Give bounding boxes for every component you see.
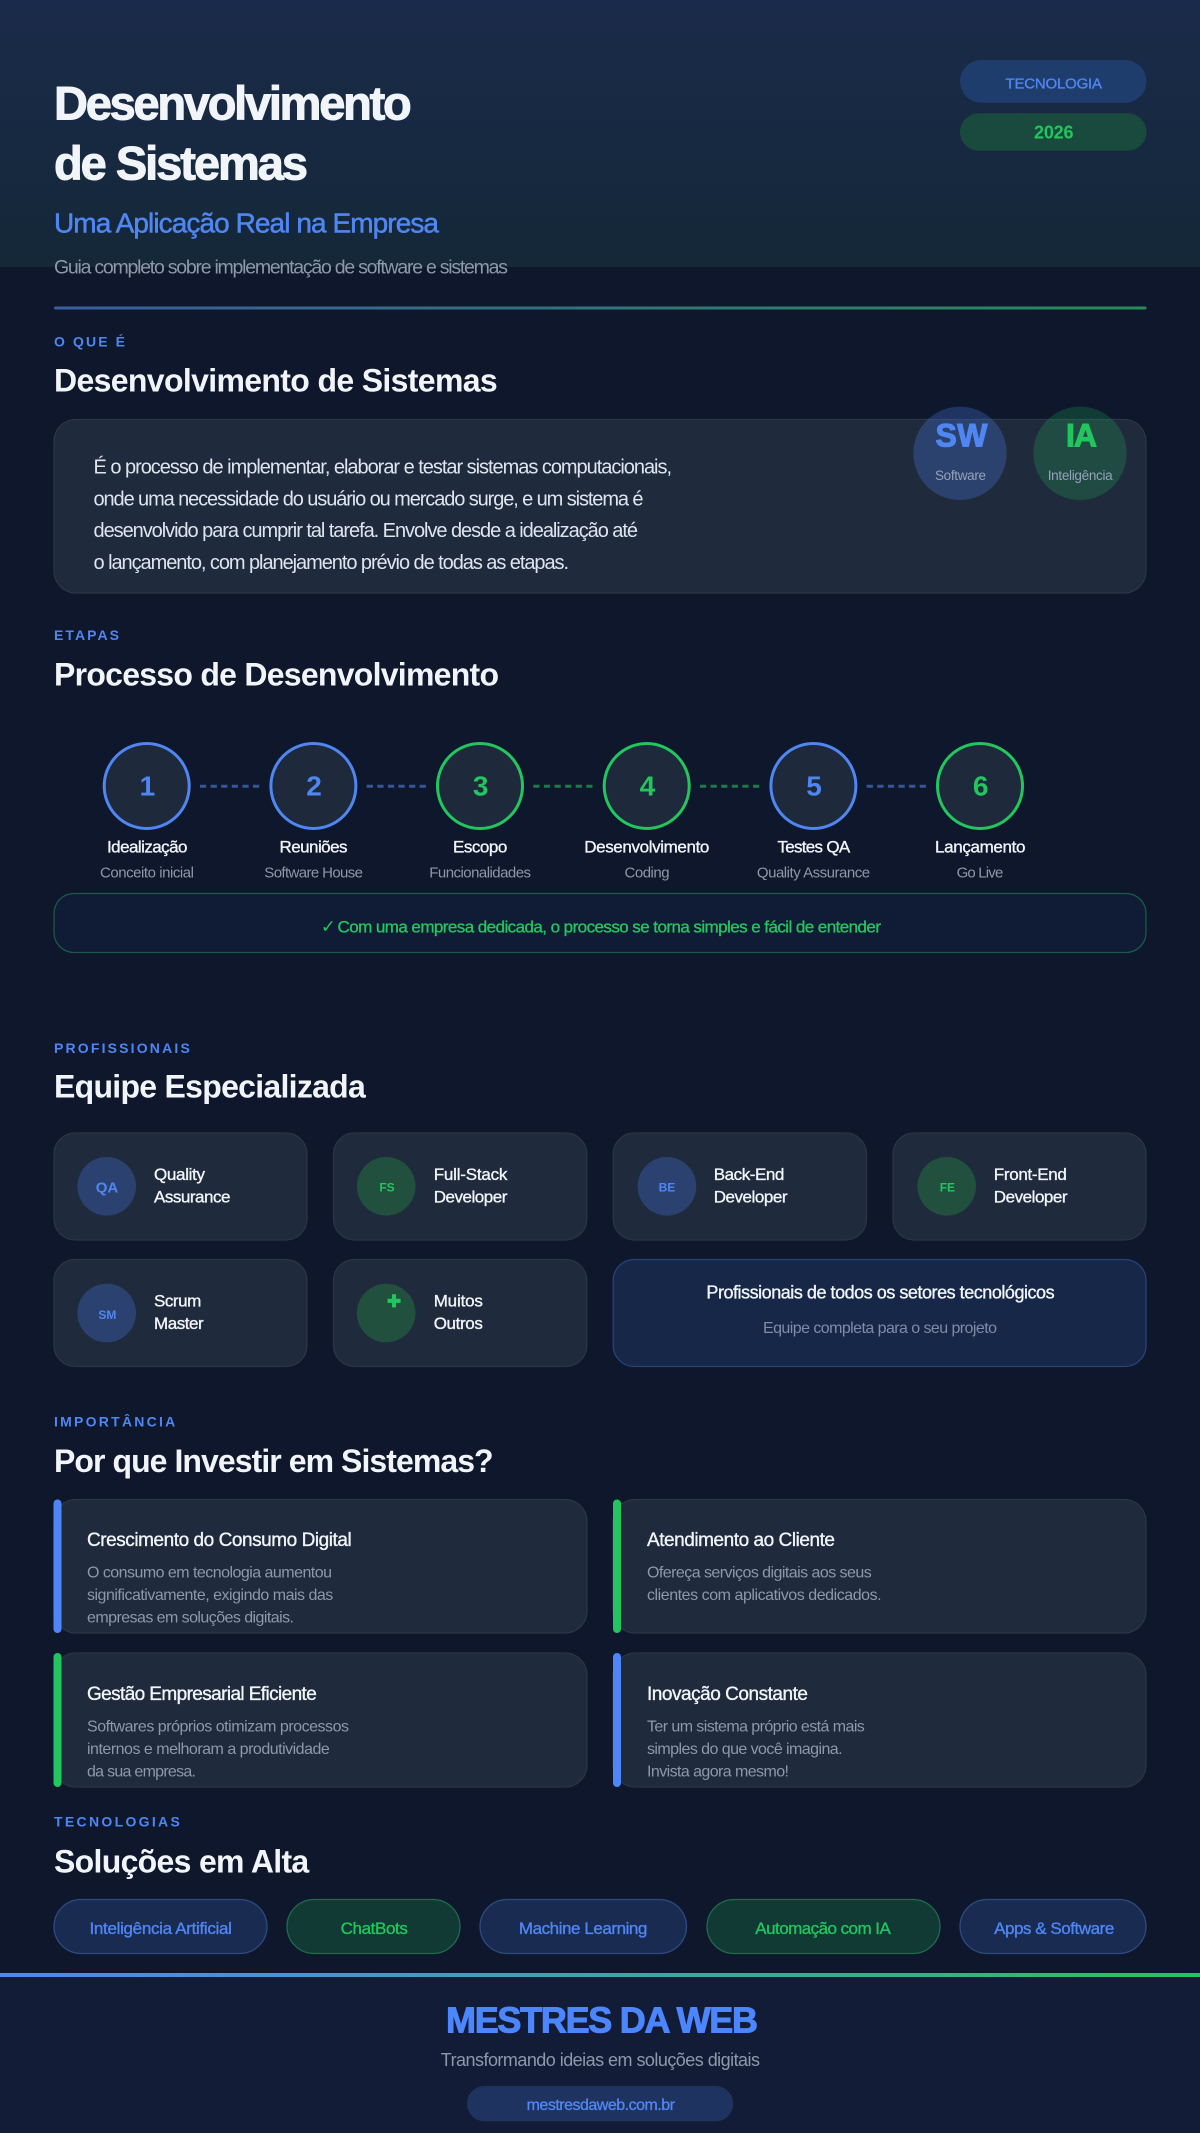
card: crescimento: O consumo em tecnologia aumentou [87,1564,332,1581]
section label: TECNOLOGIAS [54,1814,180,1830]
card: muitos outros: ✚ [387,1292,401,1312]
section: tecnologias [54,1814,1146,1954]
step 4: Coding [624,864,670,881]
tagline: Guia completo sobre implementação de software e sistemas [54,256,508,278]
card: front-end: Front-End [994,1165,1067,1184]
card: full-stack: Full-Stack [434,1165,508,1184]
step 3: Funcionalidades [429,864,531,881]
section heading: Desenvolvimento de Sistemas [54,363,498,399]
footer tagline: Transformando ideias em soluções digitais [441,2050,760,2070]
section label: PROFISSIONAIS [54,1040,190,1056]
card: inovação: simples do que você imagina. [647,1741,843,1758]
section heading: Soluções em Alta [54,1843,309,1879]
card: full-stack: Developer [434,1188,508,1206]
section label: IMPORTÂNCIA [54,1413,175,1430]
panel: definition [54,420,1146,593]
card: back-end: Developer [714,1188,788,1206]
card: todos os setores: Profissionais de todos os setores tecnológicos [706,1283,1055,1303]
icon: software [913,407,1007,500]
card: gestão: Gestão Empresarial Eficiente [87,1684,317,1705]
card: full-stack: FS [379,1180,395,1194]
process steps [100,744,1026,881]
step 2: Software House [264,864,363,881]
tag: automação com ia [707,1900,940,1954]
card: inovação: Ter um sistema próprio está mais [647,1718,865,1735]
footer [0,1973,1200,2133]
step 5: Testes QA [778,838,851,857]
card: atendimento [613,1500,1146,1633]
section heading: Processo de Desenvolvimento [54,656,499,692]
card: crescimento: significativamente, exigindo mais das [87,1587,333,1604]
callout [54,894,1146,952]
card: todos os setores [613,1260,1146,1366]
card: crescimento: empresas em soluções digitais. [87,1610,294,1627]
title: Desenvolvimento [54,76,412,129]
card: quality assurance: Quality [154,1165,206,1184]
card: quality assurance [54,1133,307,1240]
step 6: Go Live [957,864,1003,881]
step 6: Lançamento [935,838,1026,857]
card: quality assurance: QA [96,1180,118,1196]
card: gestão: da sua empresa. [87,1764,196,1781]
subtitle: Uma Aplicação Real na Empresa [54,208,439,239]
section: etapas [54,627,1146,952]
tag: automação com ia: Automação com IA [755,1919,891,1938]
step 2: Reuniões [280,838,348,857]
step 3 [429,744,531,881]
badge: tecnologia: TECNOLOGIA [1006,75,1102,92]
tag: apps e software: Apps & Software [994,1919,1114,1938]
step 5: Quality Assurance [757,864,870,881]
card: quality assurance: Assurance [154,1188,230,1206]
section heading: Equipe Especializada [54,1068,366,1104]
callout: Com uma empresa dedicada, o processo se torna simples e fácil de entender [338,918,881,937]
step 2 [264,744,363,881]
panel: definition: É o processo de implementar, elaborar e testar sistemas computacionais, [94,455,672,478]
website pill: mestresdaweb.com.br [527,2097,676,2114]
step 1: Conceito inicial [100,864,194,881]
step 2: 2 [306,770,322,802]
icon: software: SW [936,418,988,454]
step 4: Desenvolvimento [584,838,709,857]
callout: ✓ [321,917,336,937]
badge: 2026 [960,113,1146,151]
card: gestão [54,1653,587,1787]
website pill [467,2086,733,2121]
badge: 2026: 2026 [1034,122,1074,142]
icon: inteligência [1033,407,1127,500]
panel: definition: o lançamento, com planejamento prévio de todas as etapas. [94,552,569,574]
step 1: 1 [140,770,155,802]
panel: definition: onde uma necessidade do usuário ou mercado surge, e um sistema é [94,488,644,510]
tag: chatbots: ChatBots [341,1919,408,1938]
step 4: 4 [640,770,656,802]
tag: apps e software [960,1900,1146,1954]
card: crescimento: Crescimento do Consumo Digital [87,1530,352,1551]
card: todos os setores: Equipe completa para o seu projeto [763,1320,997,1337]
step 5 [757,744,870,881]
card: gestão: internos e melhoram a produtividade [87,1741,330,1758]
card: scrum master [54,1260,307,1366]
section: importância [54,1413,1146,1787]
icon: software: Software [935,468,986,483]
section: o que é [54,334,1146,593]
card: scrum master: Scrum [154,1292,201,1311]
tag: machine learning [480,1900,686,1954]
card: muitos outros [334,1260,587,1366]
card: crescimento [54,1500,587,1633]
title [54,76,412,189]
card: atendimento: clientes com aplicativos dedicados. [647,1587,882,1604]
card: back-end: Back-End [714,1165,784,1184]
section label: ETAPAS [54,627,119,643]
title: de Sistemas [54,136,308,189]
card: inovação [613,1653,1146,1787]
card: front-end: FE [940,1180,955,1194]
card: back-end: BE [659,1180,675,1194]
brand: MESTRES DA WEB [446,2000,758,2041]
step 3: 3 [473,770,488,802]
panel: definition: desenvolvido para cumprir tal tarefa. Envolve desde a idealização até [94,520,638,542]
tag: inteligência artificial: Inteligência Artificial [90,1919,232,1938]
icon: inteligência: IA [1066,418,1097,454]
step 1 [100,744,194,881]
card: front-end: Developer [994,1188,1068,1206]
card: inovação: Invista agora mesmo! [647,1764,789,1781]
badge: tecnologia [960,60,1146,103]
step 1: Idealização [107,838,188,857]
header band [0,0,1200,278]
section heading: Por que Investir em Sistemas? [54,1443,494,1479]
card: atendimento: Ofereça serviços digitais aos seus [647,1564,872,1581]
icon: inteligência: Inteligência [1048,468,1113,483]
card: muitos outros: Outros [434,1314,483,1333]
divider [54,306,1146,310]
step 5: 5 [806,770,822,802]
tag: chatbots [287,1900,460,1954]
section label: O QUE É [54,334,125,350]
card: scrum master: SM [98,1308,116,1322]
card: full-stack [334,1133,587,1240]
card: gestão: Softwares próprios otimizam processos [87,1718,349,1735]
tag: inteligência artificial [54,1900,267,1954]
step 6: 6 [973,770,988,802]
step 6 [935,744,1026,881]
section: profissionais [54,1040,1146,1366]
step 3: Escopo [453,838,507,857]
tag: machine learning: Machine Learning [519,1919,647,1938]
card: inovação: Inovação Constante [647,1684,808,1705]
card: front-end [893,1133,1146,1240]
step 4 [584,744,709,881]
card: scrum master: Master [154,1314,204,1333]
card: atendimento: Atendimento ao Cliente [647,1530,835,1551]
card: muitos outros: Muitos [434,1292,483,1311]
card: back-end [613,1133,866,1240]
